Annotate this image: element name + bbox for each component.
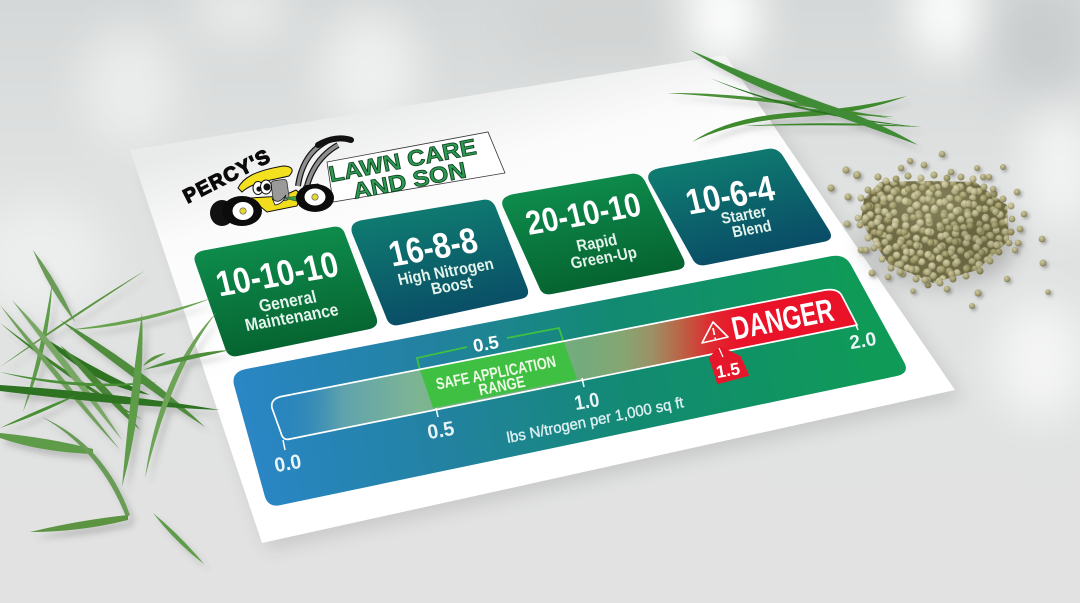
card: 10-10-10 General Maintenance: General xyxy=(257,287,319,316)
logo: Percy's Lawn Care and Son xyxy=(180,132,505,226)
card: 10-10-10 General Maintenance xyxy=(194,227,377,356)
safe application range block: RANGE xyxy=(477,374,527,399)
card: 10-6-4 Starter Blend: Starter xyxy=(719,203,769,228)
tick label 0.0: 0.0 xyxy=(273,451,303,477)
card: 16-8-8 High Nitrogen Boost: High Nitrogen xyxy=(396,255,496,289)
tick label 1.0: 1.0 xyxy=(573,389,601,415)
safe range bracket with 0.5 label xyxy=(417,328,563,370)
card: 20-10-10 Rapid Green-Up: Green-Up xyxy=(569,244,639,273)
logo sign box: AND SON xyxy=(351,157,468,204)
pile edge pellets xyxy=(854,171,1015,288)
scale bar outline xyxy=(272,290,857,439)
panel: application rate scale xyxy=(234,256,906,506)
card: 16-8-8 High Nitrogen Boost: Boost xyxy=(429,274,474,299)
card: 20-10-10 Rapid Green-Up xyxy=(502,174,685,294)
card: 20-10-10 Rapid Green-Up: 20-10-10 xyxy=(522,185,645,242)
logo sign box: LAWN CARE xyxy=(327,134,478,187)
marker tag 1.5: 1.5 xyxy=(715,359,742,382)
card: 16-8-8 High Nitrogen Boost xyxy=(351,200,528,325)
scale bar gradient fill xyxy=(272,290,857,439)
fertilizer pellet pile xyxy=(827,151,1051,309)
card: 16-8-8 High Nitrogen Boost: 16-8-8 xyxy=(385,221,482,275)
safe range bracket with 0.5 label: 0.5 xyxy=(471,332,500,356)
grass clippings left xyxy=(0,250,230,564)
tick label 2.0: 2.0 xyxy=(848,329,878,354)
sheet shadow xyxy=(145,70,962,549)
paper sheet xyxy=(130,55,955,543)
scale ticks xyxy=(283,325,858,450)
safe application range block xyxy=(420,340,577,408)
logo sign box xyxy=(327,132,505,204)
card: 10-6-4 Starter Blend: 10-6-4 xyxy=(682,169,779,223)
safe application range block: SAFE APPLICATION xyxy=(434,353,558,394)
logo word Percy's: PERCY'S xyxy=(180,145,275,208)
grass blades top right xyxy=(667,50,922,145)
axis label: lbs N/trogen per 1,000 sq ft xyxy=(505,394,686,447)
danger label: DANGER xyxy=(728,291,837,347)
scattered pellets xyxy=(827,151,1051,309)
icon: warning triangle xyxy=(702,322,728,343)
tick label 0.5: 0.5 xyxy=(426,418,456,444)
icon: cartoon lawn mower xyxy=(210,138,351,226)
card: 10-10-10 General Maintenance: Maintenance xyxy=(243,300,340,335)
card: 10-6-4 Starter Blend xyxy=(648,149,831,265)
card: 20-10-10 Rapid Green-Up: Rapid xyxy=(575,231,619,256)
card: 10-6-4 Starter Blend: Blend xyxy=(730,217,773,241)
marker tag 1.5 xyxy=(710,347,748,383)
card: 10-10-10 General Maintenance: 10-10-10 xyxy=(212,245,343,305)
